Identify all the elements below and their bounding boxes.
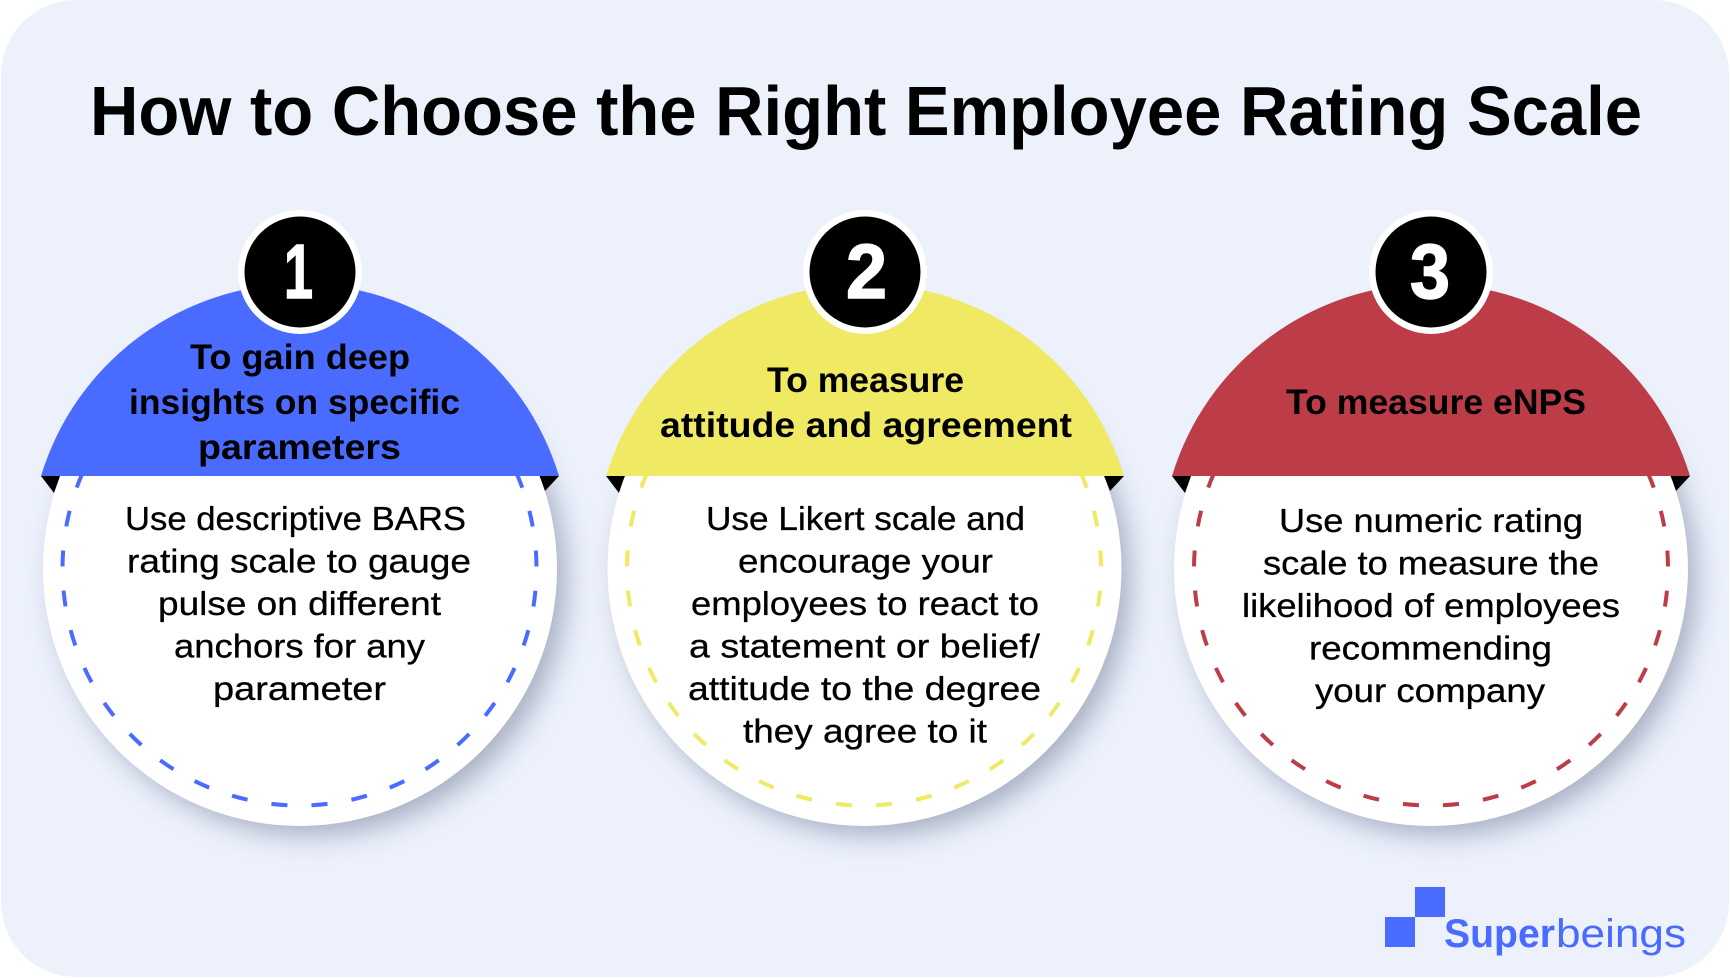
body text: they agree to it bbox=[743, 712, 987, 750]
body text: rating scale to gauge bbox=[127, 542, 471, 580]
body text: pulse on different bbox=[158, 585, 441, 622]
dashed ring bbox=[62, 332, 536, 806]
body text: anchors for any bbox=[174, 628, 426, 664]
body text: Use numeric rating bbox=[1279, 502, 1583, 539]
number badge bbox=[803, 210, 927, 334]
body text: employees to react to bbox=[691, 585, 1039, 622]
body text bbox=[1242, 502, 1620, 709]
body text bbox=[125, 500, 471, 707]
right fold bbox=[1670, 476, 1690, 491]
dashed ring bbox=[627, 332, 1101, 806]
panel: step 2 bbox=[606, 210, 1130, 835]
logo mark bbox=[1385, 887, 1445, 947]
body text: a statement or belief/ bbox=[689, 628, 1041, 664]
heading: parameters bbox=[198, 428, 401, 467]
number badge bbox=[1369, 210, 1493, 334]
body text: likelihood of employees bbox=[1242, 587, 1620, 624]
body text: recommending bbox=[1309, 630, 1552, 666]
body text: encourage your bbox=[738, 542, 993, 580]
left fold bbox=[1172, 476, 1191, 493]
body text: Use Likert scale and bbox=[706, 500, 1025, 537]
number badge: 3 bbox=[1410, 229, 1450, 315]
title: How to Choose the Right Employee Rating Scale bbox=[90, 72, 1642, 150]
left fold bbox=[606, 476, 625, 493]
white circle card bbox=[1174, 312, 1688, 826]
card shadow bbox=[56, 325, 566, 835]
heading: To measure bbox=[767, 361, 964, 400]
heading: attitude and agreement bbox=[660, 406, 1072, 445]
header dome bbox=[606, 284, 1124, 476]
white circle card bbox=[43, 312, 557, 826]
heading: To gain deep bbox=[190, 338, 410, 377]
heading bbox=[129, 338, 460, 467]
wordmark: Super bbox=[1444, 912, 1555, 956]
body text: your company bbox=[1315, 672, 1546, 709]
right fold bbox=[1104, 476, 1124, 491]
body text: parameter bbox=[213, 670, 386, 707]
number badge bbox=[238, 210, 362, 334]
card shadow bbox=[620, 325, 1130, 835]
number badge: 1 bbox=[284, 229, 313, 315]
wordmark: beings bbox=[1556, 912, 1686, 956]
body text: Use descriptive BARS bbox=[125, 500, 466, 537]
heading: insights on specific bbox=[129, 383, 460, 422]
right fold bbox=[539, 476, 559, 491]
header dome bbox=[41, 284, 559, 476]
body text bbox=[688, 500, 1041, 750]
wordmark bbox=[1444, 912, 1686, 956]
header dome bbox=[1172, 284, 1690, 476]
left fold bbox=[41, 476, 60, 493]
logo: Superbeings bbox=[1385, 887, 1686, 956]
white circle card bbox=[608, 312, 1122, 826]
body text: scale to measure the bbox=[1263, 544, 1599, 582]
panel: step 3 bbox=[1172, 210, 1696, 835]
card shadow bbox=[1186, 325, 1696, 835]
number badge: 2 bbox=[846, 229, 887, 315]
dashed ring bbox=[1194, 332, 1668, 806]
heading bbox=[660, 361, 1072, 445]
panel: step 1 bbox=[41, 210, 566, 835]
heading: To measure eNPS bbox=[1286, 383, 1586, 422]
body text: attitude to the degree bbox=[688, 670, 1041, 707]
